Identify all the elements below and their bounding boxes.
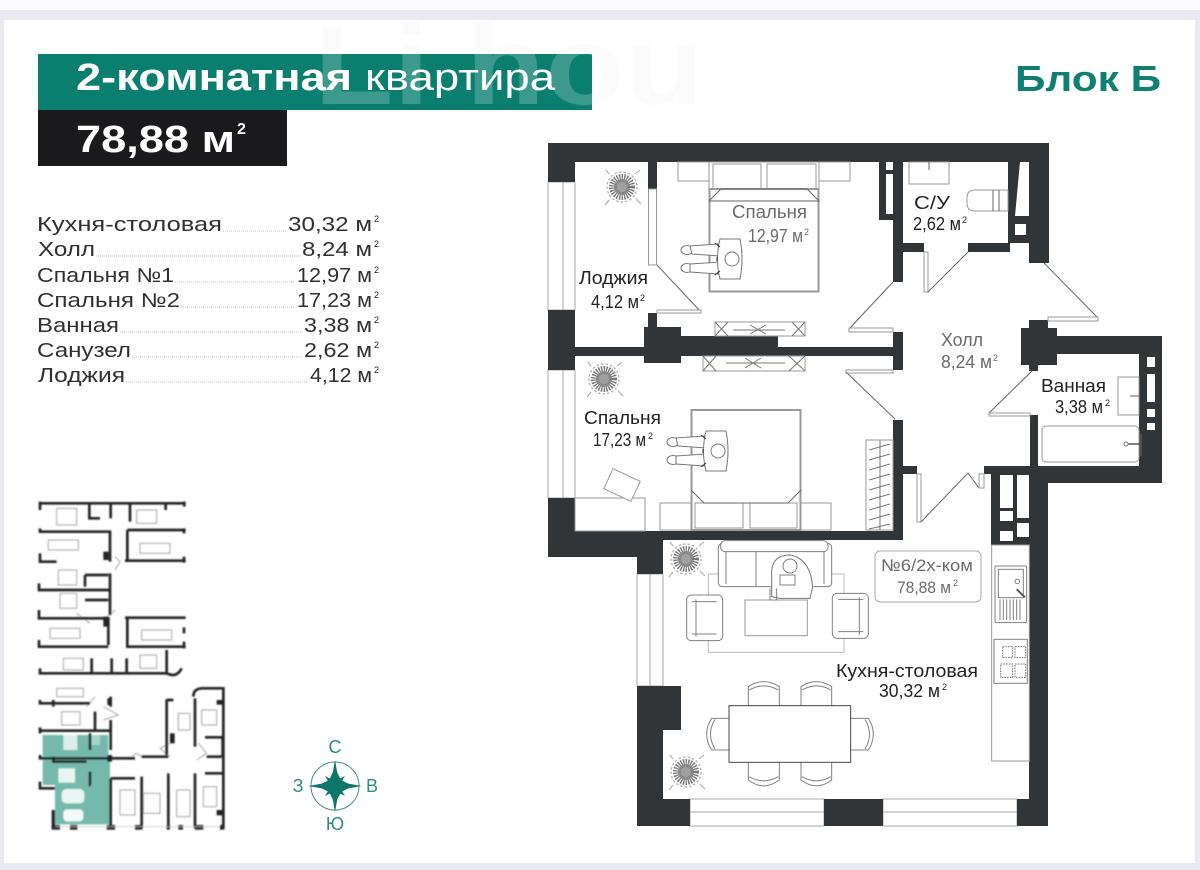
room area list: 17,23 м (297, 290, 372, 312)
room area list: Спальня №1 (37, 265, 174, 287)
doors (648, 189, 1098, 522)
room area list: 3,38 м (304, 315, 372, 337)
compass: З (293, 776, 303, 796)
room area list: 2 (374, 239, 379, 249)
room area list: Спальня №2 (37, 290, 180, 312)
room area list: 2 (374, 214, 379, 224)
floor key plan (39, 502, 224, 830)
key plan furniture (48, 508, 217, 817)
room area list: 2 (374, 265, 379, 275)
label: hall: 8,24 м (941, 352, 992, 372)
label: bathroom: 2 (1105, 398, 1110, 408)
label: bedroom 1: 2 (804, 227, 809, 237)
room area list: 2 (374, 365, 379, 375)
bedroom 1 furniture (678, 162, 850, 336)
label: bedroom 2: 17,23 м (593, 430, 646, 450)
label: bathroom: 3,38 м (1055, 397, 1103, 417)
title banner: 2-комнатная (76, 57, 352, 99)
label: bedroom 2 (584, 408, 661, 450)
highlighted apartment (43, 735, 110, 824)
room area list: Ванная (37, 315, 119, 337)
compass: С (328, 737, 342, 757)
room area list: 2 (374, 340, 379, 350)
room area list: 2,62 м (304, 340, 372, 362)
label: loggia: 4,12 м (591, 292, 639, 312)
label: bathroom (1041, 376, 1110, 417)
label: bedroom 1: 12,97 м (748, 226, 803, 246)
room area list: 30,32 м (288, 214, 372, 236)
room area list: Санузел (37, 340, 131, 362)
total area badge: 78,88 м (76, 119, 235, 161)
label: bathroom WC: 2,62 м (913, 214, 961, 234)
label: loggia: Лоджия (579, 268, 648, 288)
key plan walls (39, 502, 223, 828)
compass: Ю (326, 814, 344, 834)
label: kitchen-dining: 30,32 м (879, 681, 940, 701)
bedroom 2 furniture (575, 356, 893, 531)
label: loggia: 2 (640, 293, 645, 303)
label: hall: 2 (993, 353, 998, 363)
apartment number tag: 2 (953, 578, 958, 588)
room area list: 2 (374, 315, 379, 325)
room area list: Кухня-столовая (37, 214, 222, 236)
label: loggia (579, 268, 648, 312)
title banner (38, 54, 592, 110)
floor plan (39, 143, 1162, 834)
apartment number tag: 78,88 м (897, 578, 951, 597)
title banner: Li hou (314, 3, 704, 128)
label: kitchen-dining: Кухня-столовая (836, 661, 978, 681)
label: bedroom 2: 2 (648, 431, 653, 441)
label: bedroom 1: Спальня (732, 202, 807, 222)
key plan window piers (52, 552, 224, 830)
label: bathroom WC (913, 193, 967, 234)
label: bathroom WC: 2 (962, 215, 967, 225)
block heading: Блок Б (1015, 58, 1161, 99)
room area list: 8,24 м (302, 239, 372, 261)
compass (293, 737, 378, 834)
room area list (37, 214, 379, 387)
plants (587, 170, 705, 790)
apartment number tag (875, 551, 981, 602)
total area badge: 2 (237, 121, 246, 138)
apartment number tag: №6/2х-ком (881, 556, 973, 575)
room area list: Холл (38, 239, 95, 261)
title banner: квартира (365, 57, 556, 99)
label: bathroom WC: С/У (914, 193, 951, 213)
label: kitchen-dining: 2 (942, 682, 947, 692)
label: hall: Холл (941, 330, 983, 350)
walls (548, 143, 1162, 826)
label: kitchen-dining (836, 661, 978, 701)
room labels (579, 193, 1110, 701)
room area list: 12,97 м (297, 265, 372, 287)
room area list: 4,12 м (310, 365, 372, 387)
total area badge (38, 110, 287, 166)
compass: В (366, 776, 378, 796)
bathroom fixtures (909, 162, 1141, 462)
label: bathroom: Ванная (1041, 376, 1106, 396)
windows (548, 182, 1017, 826)
room area list: 2 (374, 290, 379, 300)
label: hall (941, 330, 998, 372)
room area list: Лоджия (38, 365, 125, 387)
label: bedroom 1 (732, 202, 809, 246)
label: bedroom 2: Спальня (584, 408, 661, 428)
living and kitchen furniture (687, 541, 1029, 786)
